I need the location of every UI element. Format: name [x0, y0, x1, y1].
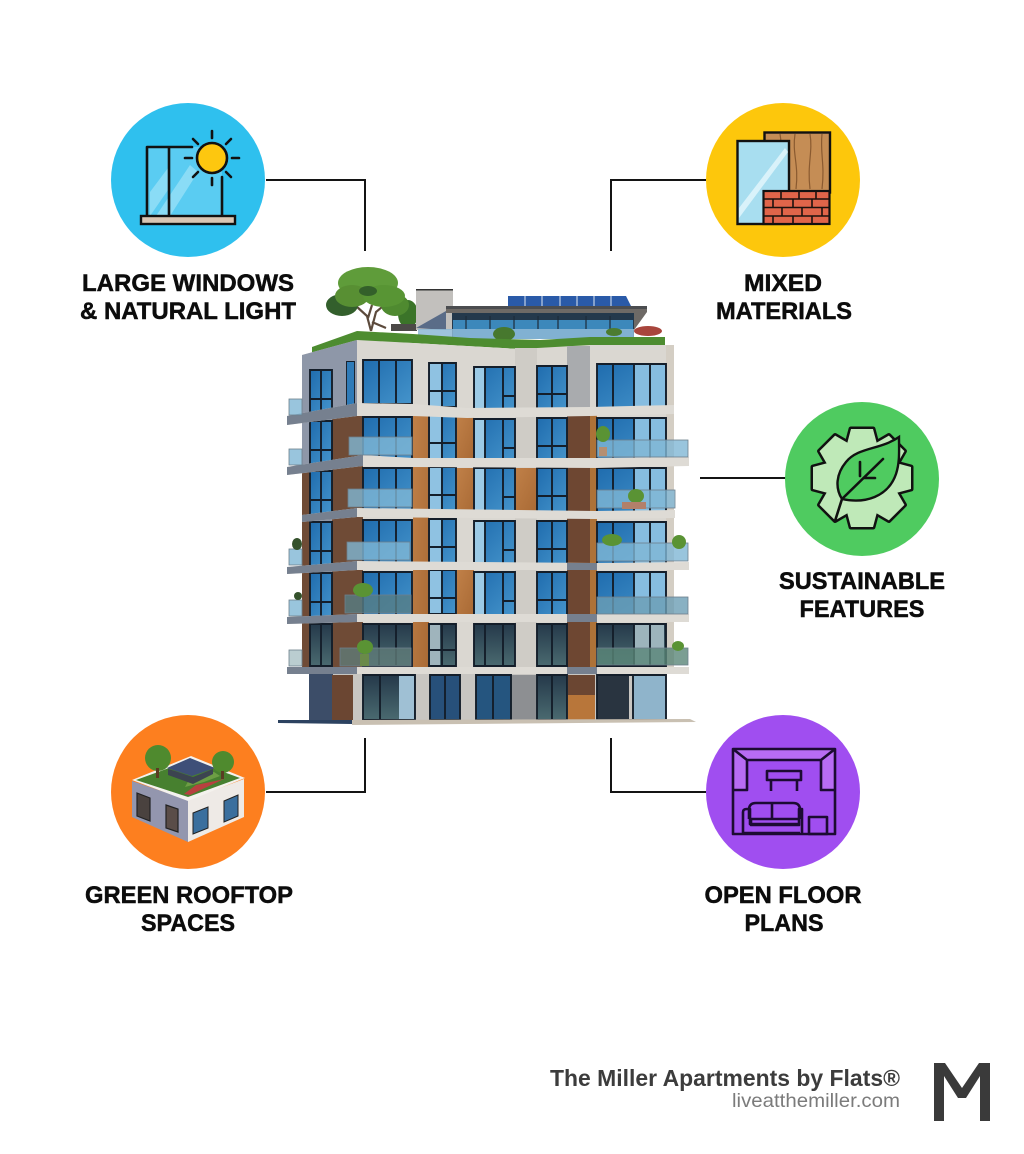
timber cladding	[302, 413, 597, 668]
footer: brand text: The Miller Apartments by Flats®	[550, 1065, 900, 1091]
label: sustainable features: SUSTAINABLE	[779, 568, 945, 595]
building	[278, 267, 696, 725]
balcony plants	[292, 426, 686, 666]
icon: green rooftop house	[111, 715, 265, 869]
rooftop tree	[326, 267, 418, 331]
connector: green rooftop	[266, 738, 365, 792]
penthouse	[418, 306, 662, 341]
floor slabs	[287, 403, 689, 674]
windows grid	[310, 360, 666, 617]
label: green rooftop spaces: GREEN ROOFTOP	[85, 882, 293, 909]
icon: large windows and sun	[111, 103, 265, 257]
label: sustainable features	[779, 568, 945, 623]
sixth-floor dark windows	[310, 624, 666, 666]
label: open floor plans	[704, 882, 862, 937]
label: large windows: & NATURAL LIGHT	[80, 298, 296, 325]
icon: mixed materials	[706, 103, 860, 257]
connector: large windows	[266, 180, 365, 251]
solar panels	[508, 296, 631, 306]
label: mixed materials: MIXED	[744, 270, 822, 297]
icon: open floor plan	[706, 715, 860, 869]
icon: gear and leaf	[785, 402, 939, 556]
green roof strip	[312, 331, 665, 353]
balconies	[289, 399, 688, 666]
chimney block	[416, 289, 453, 330]
label: large windows: LARGE WINDOWS	[82, 270, 294, 297]
label: open floor plans: PLANS	[744, 910, 824, 937]
slab shaded ends	[287, 403, 597, 674]
connector: open floor plans	[611, 738, 706, 792]
footer: M logo	[934, 1063, 990, 1121]
label: green rooftop spaces	[85, 882, 293, 937]
ground floor	[278, 674, 696, 725]
label: open floor plans: OPEN FLOOR	[704, 882, 862, 909]
label: mixed materials	[716, 270, 852, 325]
label: mixed materials: MATERIALS	[716, 298, 852, 325]
label: sustainable features: FEATURES	[800, 596, 924, 623]
label: green rooftop spaces: SPACES	[141, 910, 235, 937]
label: large windows	[80, 270, 296, 325]
connector: mixed materials	[611, 180, 706, 251]
connector: sustainable features	[700, 477, 786, 479]
facade walls	[302, 340, 674, 671]
footer: brand text	[550, 1065, 900, 1112]
footer: brand text: liveatthemiller.com	[732, 1090, 900, 1112]
